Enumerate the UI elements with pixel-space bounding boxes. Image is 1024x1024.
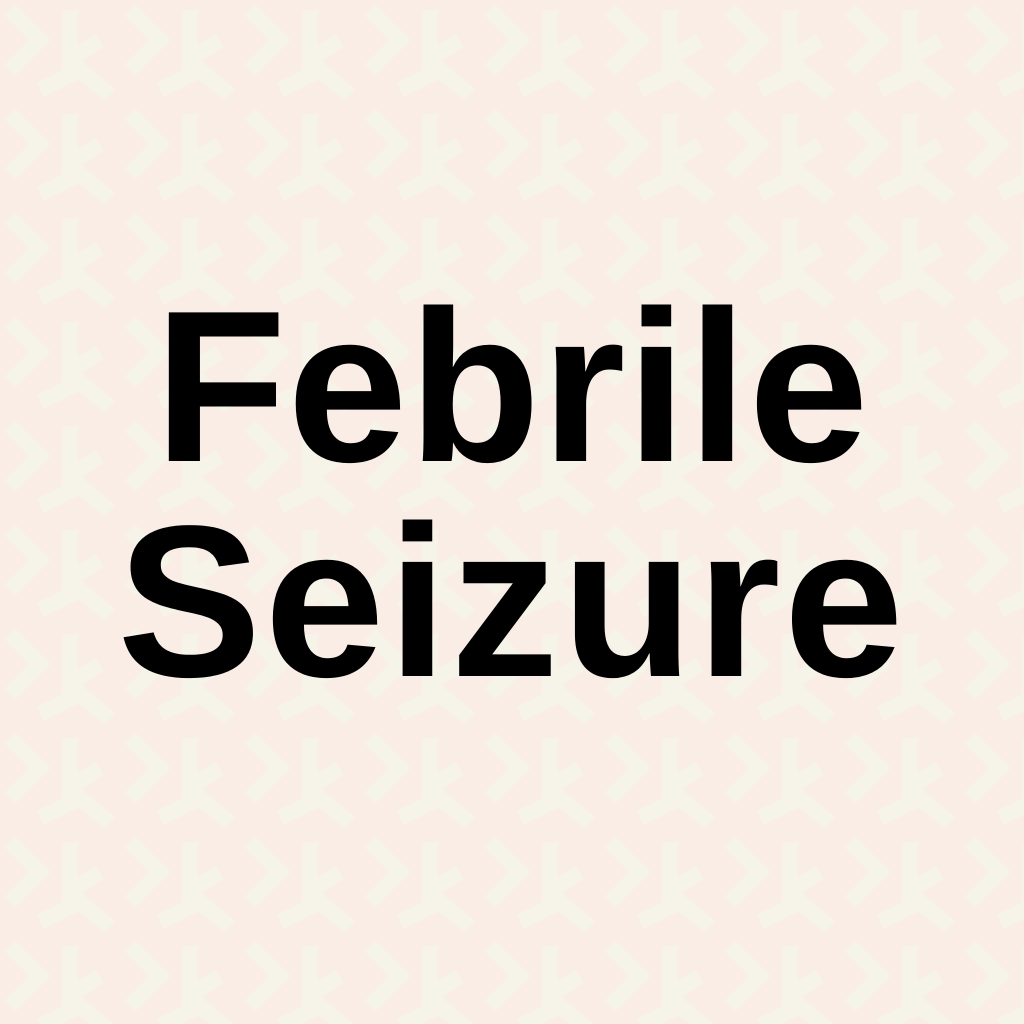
title: Febrile bbox=[154, 265, 870, 507]
title: Seizure bbox=[117, 480, 907, 722]
